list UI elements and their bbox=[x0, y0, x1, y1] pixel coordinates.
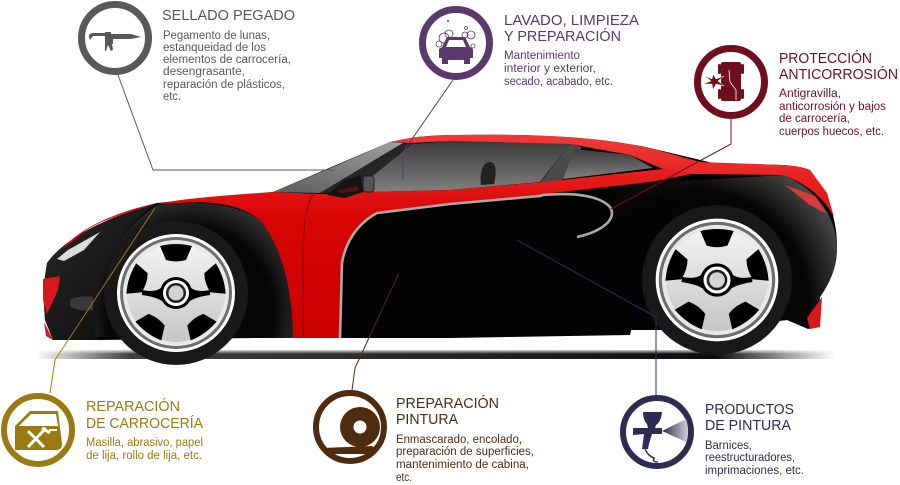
text: lavado: secado, acabado, etc. bbox=[504, 76, 613, 88]
text: sellado pegado: reparación de plásticos, bbox=[163, 79, 285, 91]
panel: reparacion bbox=[4, 396, 203, 464]
text: preparacion pintura: Enmascarado, encolado, bbox=[396, 434, 522, 446]
text: proteccion bbox=[779, 88, 886, 138]
panel: proteccion bbox=[698, 48, 898, 138]
heading: proteccion: PROTECCIÓN bbox=[779, 50, 872, 67]
leader: sellado bbox=[118, 75, 335, 170]
text: preparacion pintura: mantenimiento de cabina, bbox=[396, 459, 529, 471]
front fender bbox=[95, 203, 293, 338]
leader: reparacion bbox=[50, 208, 155, 393]
icon: masking tape roll bbox=[316, 393, 384, 461]
heading: lavado: Y PREPARACIÓN bbox=[504, 28, 621, 45]
icon: underbody protection bbox=[698, 48, 764, 116]
red hood strip bbox=[62, 203, 157, 249]
text: sellado pegado bbox=[163, 30, 291, 103]
icon: spray gun bbox=[623, 398, 691, 466]
text: preparacion pintura: etc. bbox=[396, 472, 412, 484]
windshield bbox=[273, 142, 403, 193]
heading: productos de pintura: DE PINTURA bbox=[705, 418, 791, 434]
leader: preparacion bbox=[352, 273, 399, 390]
door pillar bbox=[540, 144, 582, 183]
rear fender fade bbox=[610, 178, 730, 330]
heading: proteccion bbox=[779, 50, 898, 83]
ground shadow bbox=[35, 349, 835, 359]
text: preparacion pintura bbox=[396, 434, 534, 484]
leader: lavado bbox=[403, 80, 453, 180]
heading: reparacion: DE CARROCERÍA bbox=[86, 415, 203, 432]
text: productos de pintura bbox=[705, 440, 804, 477]
heading: preparacion pintura: PINTURA bbox=[396, 412, 458, 428]
heading: lavado: LAVADO, LIMPIEZA bbox=[504, 13, 639, 29]
panel: productos de pintura bbox=[623, 398, 804, 477]
panel: lavado bbox=[422, 10, 639, 88]
car body bbox=[43, 135, 837, 340]
panel: sellado pegado bbox=[82, 4, 295, 103]
heading: preparacion pintura bbox=[396, 395, 499, 428]
front wheel bbox=[104, 221, 248, 365]
text: proteccion: de carrocería, bbox=[779, 113, 850, 125]
front lip accent bbox=[44, 322, 53, 340]
text: reparacion bbox=[86, 437, 203, 462]
icon: car wash bbox=[422, 10, 490, 76]
icon: car door with tools bbox=[4, 396, 72, 464]
headlight bbox=[57, 232, 100, 261]
text: productos de pintura: reestructuradores, bbox=[705, 452, 795, 464]
heading: productos de pintura: PRODUCTOS bbox=[705, 402, 794, 418]
mirror bbox=[327, 175, 374, 198]
text: proteccion: anticorrosión y bajos bbox=[779, 101, 886, 113]
text: sellado pegado: etc. bbox=[163, 91, 181, 103]
rear fender bbox=[610, 175, 837, 330]
front lower slot bbox=[70, 296, 93, 310]
text: lavado: Mantenimiento bbox=[504, 50, 580, 62]
text: lavado: interior y exterior, bbox=[504, 63, 596, 75]
heading: proteccion: ANTICORROSIÓN bbox=[779, 66, 898, 83]
heading: productos de pintura bbox=[705, 402, 794, 434]
rear wheel bbox=[642, 205, 792, 355]
text: sellado pegado: estanqueidad de los bbox=[163, 42, 266, 54]
text: proteccion: Antigravilla, bbox=[779, 88, 841, 100]
text: productos de pintura: Barnices, bbox=[705, 440, 752, 452]
text: reparacion: de lija, rollo de lija, etc. bbox=[86, 450, 202, 462]
leader: productos bbox=[517, 240, 656, 395]
a pillar bbox=[320, 143, 412, 193]
door line bbox=[303, 195, 313, 338]
panel: preparacion pintura bbox=[316, 393, 534, 484]
icon: sealant gun bbox=[82, 4, 148, 72]
heading: lavado bbox=[504, 13, 639, 45]
heading: preparacion pintura: PREPARACIÓN bbox=[396, 395, 499, 412]
nose bbox=[43, 203, 157, 340]
text: lavado bbox=[504, 50, 613, 88]
seat silhouette bbox=[481, 162, 496, 185]
front air intake bbox=[43, 276, 60, 314]
heading: sellado pegado: SELLADO PEGADO bbox=[162, 8, 295, 24]
text: sellado pegado: Pegamento de lunas, bbox=[163, 30, 270, 42]
rear window bbox=[563, 149, 653, 179]
text: proteccion: cuerpos huecos, etc. bbox=[779, 126, 884, 138]
text: sellado pegado: elementos de carrocería, bbox=[163, 54, 291, 66]
leader: proteccion bbox=[611, 119, 731, 209]
text: preparacion pintura: preparación de superficies, bbox=[396, 446, 534, 458]
red roof and deck bbox=[390, 135, 834, 217]
rear bumper accent bbox=[807, 297, 822, 329]
text: sellado pegado: desengrasante, bbox=[163, 66, 245, 78]
car bbox=[43, 135, 837, 365]
heading: reparacion: REPARACIÓN bbox=[86, 398, 180, 415]
heading: reparacion bbox=[86, 398, 203, 432]
rear light bbox=[785, 185, 827, 214]
side window bbox=[367, 141, 570, 192]
chrome trim bbox=[340, 194, 612, 338]
text: productos de pintura: imprimaciones, etc. bbox=[705, 465, 804, 477]
text: reparacion: Masilla, abrasivo, papel bbox=[86, 437, 203, 449]
leader lines bbox=[50, 75, 731, 395]
red front panel bbox=[157, 169, 692, 338]
